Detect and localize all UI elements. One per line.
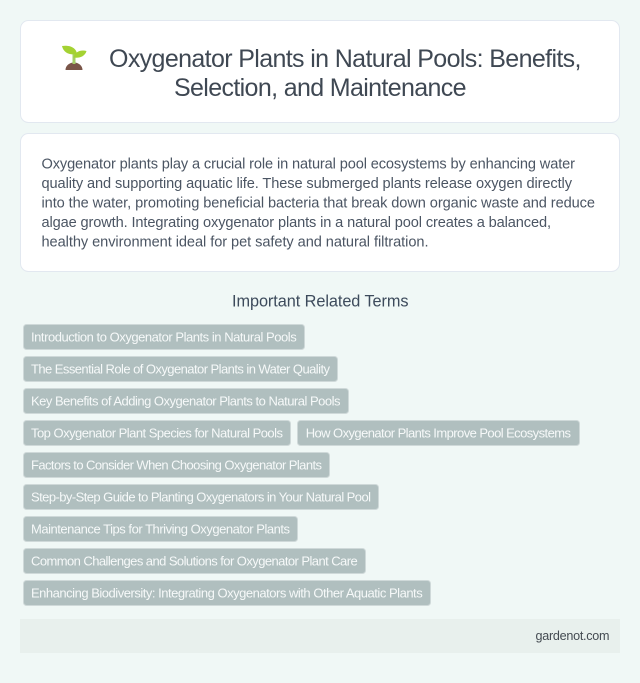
tag: factors: Factors to Consider When Choosing Oxygenator Plants — [31, 458, 322, 472]
tag: top species — [24, 420, 290, 446]
tag: step-by-step: Step-by-Step Guide to Planting Oxygenators in Your Natural Pool — [31, 490, 371, 504]
footer — [20, 619, 620, 653]
tag: factors — [24, 452, 330, 478]
text block: introduction paragraph: algae growth. Integrating oxygenator plants in a natural pool creates a balanced, — [42, 215, 551, 231]
tag: essential role: The Essential Role of Oxygenator Plants in Water Quality — [31, 362, 331, 376]
tag: key benefits: Key Benefits of Adding Oxygenator Plants to Natural Pools — [31, 394, 341, 408]
title — [109, 45, 582, 102]
tag: top species: Top Oxygenator Plant Species for Natural Pools — [31, 426, 284, 440]
tag: essential role — [24, 356, 338, 382]
tag: biodiversity: Enhancing Biodiversity: Integrating Oxygenators with Other Aquatic Plants — [31, 586, 423, 600]
text block: introduction paragraph — [42, 156, 595, 250]
tag: pool ecosystems: How Oxygenator Plants Improve Pool Ecosystems — [306, 426, 572, 440]
text block: introduction paragraph: quality and supporting aquatic life. These submerged plants release oxygen directly — [42, 176, 573, 192]
text block: introduction paragraph: Oxygenator plants play a crucial role in natural pool ecosystems by enhancing water — [42, 156, 575, 172]
heading: important related terms: Important Related Terms — [232, 293, 408, 311]
tag: introduction — [24, 324, 304, 350]
tag: step-by-step — [24, 484, 378, 510]
tag: challenges — [24, 548, 366, 574]
tag: maintenance — [24, 516, 298, 542]
title: Selection, and Maintenance — [174, 74, 466, 102]
text block: introduction paragraph: healthy environment ideal for pet safety and natural filtration. — [42, 234, 428, 250]
title: Oxygenator Plants in Natural Pools: Benefits, — [109, 45, 582, 73]
footer source text: gardenot.com — [536, 629, 610, 643]
tag: pool ecosystems — [298, 420, 580, 446]
tag: biodiversity — [24, 580, 430, 606]
tag: key benefits — [24, 388, 348, 414]
tag: maintenance: Maintenance Tips for Thriving Oxygenator Plants — [31, 522, 290, 536]
tag: challenges: Common Challenges and Solutions for Oxygenator Plant Care — [31, 554, 358, 568]
panel: title card — [20, 20, 620, 122]
text block: introduction paragraph: into the water, promoting beneficial bacteria that break down organic waste and reduce — [42, 196, 595, 212]
panel: introduction text — [20, 134, 620, 272]
panel: related terms tags — [24, 324, 580, 606]
icon: sprout — [62, 46, 86, 70]
tag: introduction: Introduction to Oxygenator Plants in Natural Pools — [31, 330, 297, 344]
